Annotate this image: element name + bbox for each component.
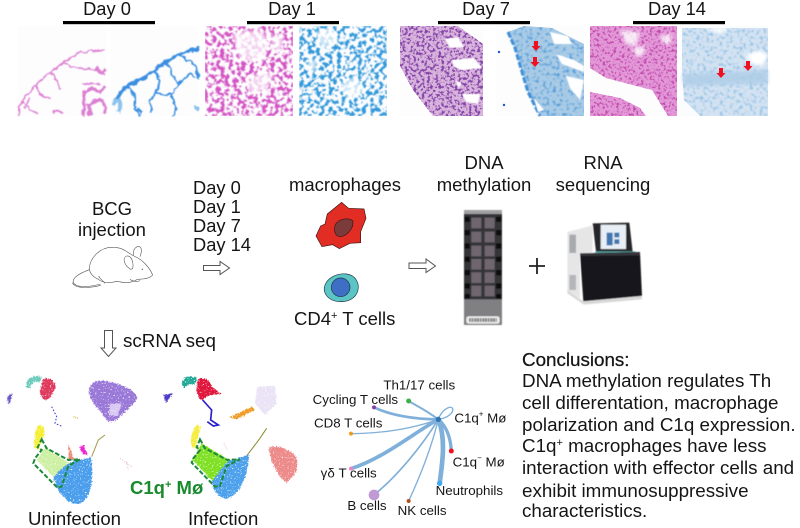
image: Day 0 IHC stained lung <box>111 26 199 116</box>
label: CD4+ T cells: + <box>331 310 337 322</box>
image: sequencer <box>567 223 642 305</box>
text block: conclusions <box>522 349 796 521</box>
chart: UMAP infection <box>163 377 297 499</box>
arrow: cells to assays <box>409 259 436 272</box>
panel: histology time course <box>18 0 768 116</box>
label: macrophages: macrophages <box>289 174 401 195</box>
text block: conclusions: polarization and C1q expression. <box>522 414 796 435</box>
outline: C1q+ macrophages <box>33 439 80 488</box>
chart: cell interaction network: Neutrophils <box>436 483 503 498</box>
label: time points: Day 7 <box>193 215 241 236</box>
image: Day 1 H&E stained lung <box>205 26 293 116</box>
text block: conclusions: macrophages have less <box>563 435 766 456</box>
text block: conclusions: exhibit immunosuppressive <box>522 480 749 501</box>
text block: conclusions: interaction with effector cells and <box>522 457 794 478</box>
chart: cell interaction network <box>313 377 506 518</box>
label: time points: Day 14 <box>193 234 251 255</box>
label: scRNA seq: scRNA seq <box>123 330 216 351</box>
image: Day 1 IHC stained lung <box>299 26 387 116</box>
symbol: plus <box>529 258 545 274</box>
chart: cell interaction network: Th1/17 cells <box>383 377 456 392</box>
label: time points: Day 1 <box>193 196 241 217</box>
label: DNA methylation: methylation <box>437 174 531 195</box>
image: Day 7 IHC stained lung with arrows <box>496 26 584 116</box>
chart: cell interaction network: Mø <box>482 455 505 470</box>
chart: cell interaction network: B cells <box>347 498 387 513</box>
arrows <box>716 61 752 78</box>
arrow: scRNA seq <box>101 330 116 356</box>
label: C1q+ Mø: Mø <box>171 477 204 498</box>
icon: CD4+ T cell <box>324 274 358 302</box>
arrow: time points to cells <box>204 262 230 274</box>
label: C1q+ Mø: + <box>165 479 171 491</box>
heading: Day 1 <box>247 0 339 24</box>
chart: cell interaction network: NK cells <box>398 503 447 518</box>
chart: cell interaction network: CD8 T cells <box>314 415 383 430</box>
label: CD4+ T cells: T cells <box>337 308 395 329</box>
text block: conclusions: C1q <box>522 435 556 456</box>
outline: C1q+ macrophages <box>192 439 240 487</box>
heading: Day 0 <box>63 0 155 24</box>
chart: cell interaction network: − <box>477 454 482 463</box>
heading: Day 14 <box>633 0 725 24</box>
text block: conclusions: characteristics. <box>522 500 647 521</box>
heading: Day 7 <box>438 0 530 24</box>
chart: cell interaction network: γδ T cells <box>321 466 377 481</box>
text block: conclusions: cell differentation, macrophage <box>522 392 778 413</box>
label: BCG injection: injection <box>78 219 146 240</box>
text block: conclusions: DNA methylation regulates Th <box>522 370 771 391</box>
heading: Conclusions: Conclusions: <box>522 349 630 370</box>
label: CD4+ T cells: CD4 <box>294 308 331 329</box>
label: C1q+ Mø: C1q <box>130 477 165 498</box>
label: RNA sequencing: RNA <box>583 152 623 173</box>
image: Day 14 IHC stained lung with arrows <box>680 26 768 116</box>
label: DNA methylation: DNA <box>464 152 504 173</box>
chart: cell interaction network: Mø <box>483 410 506 425</box>
label: time points: Day 0 <box>193 177 241 198</box>
chart: cell interaction network: Cycling T cells <box>313 392 398 407</box>
image: Day 0 H&E stained lung <box>18 26 199 116</box>
chart: cell interaction network: C1q <box>454 410 479 425</box>
chart: cell interaction network: + <box>479 409 484 418</box>
icon: macrophage cell <box>316 202 366 249</box>
label: RNA sequencing: sequencing <box>556 174 650 195</box>
chart: UMAP uninfection <box>7 376 137 504</box>
label: BCG injection: BCG <box>92 198 132 219</box>
text block: conclusions: + <box>556 437 563 449</box>
arrows <box>530 41 540 67</box>
image: Day 7 H&E stained lung <box>400 26 483 116</box>
icon: mouse <box>72 246 153 288</box>
chart: cell interaction network: C1q <box>453 455 477 470</box>
image: methylation chip <box>464 210 502 325</box>
image: Day 14 H&E stained lung <box>590 26 677 116</box>
